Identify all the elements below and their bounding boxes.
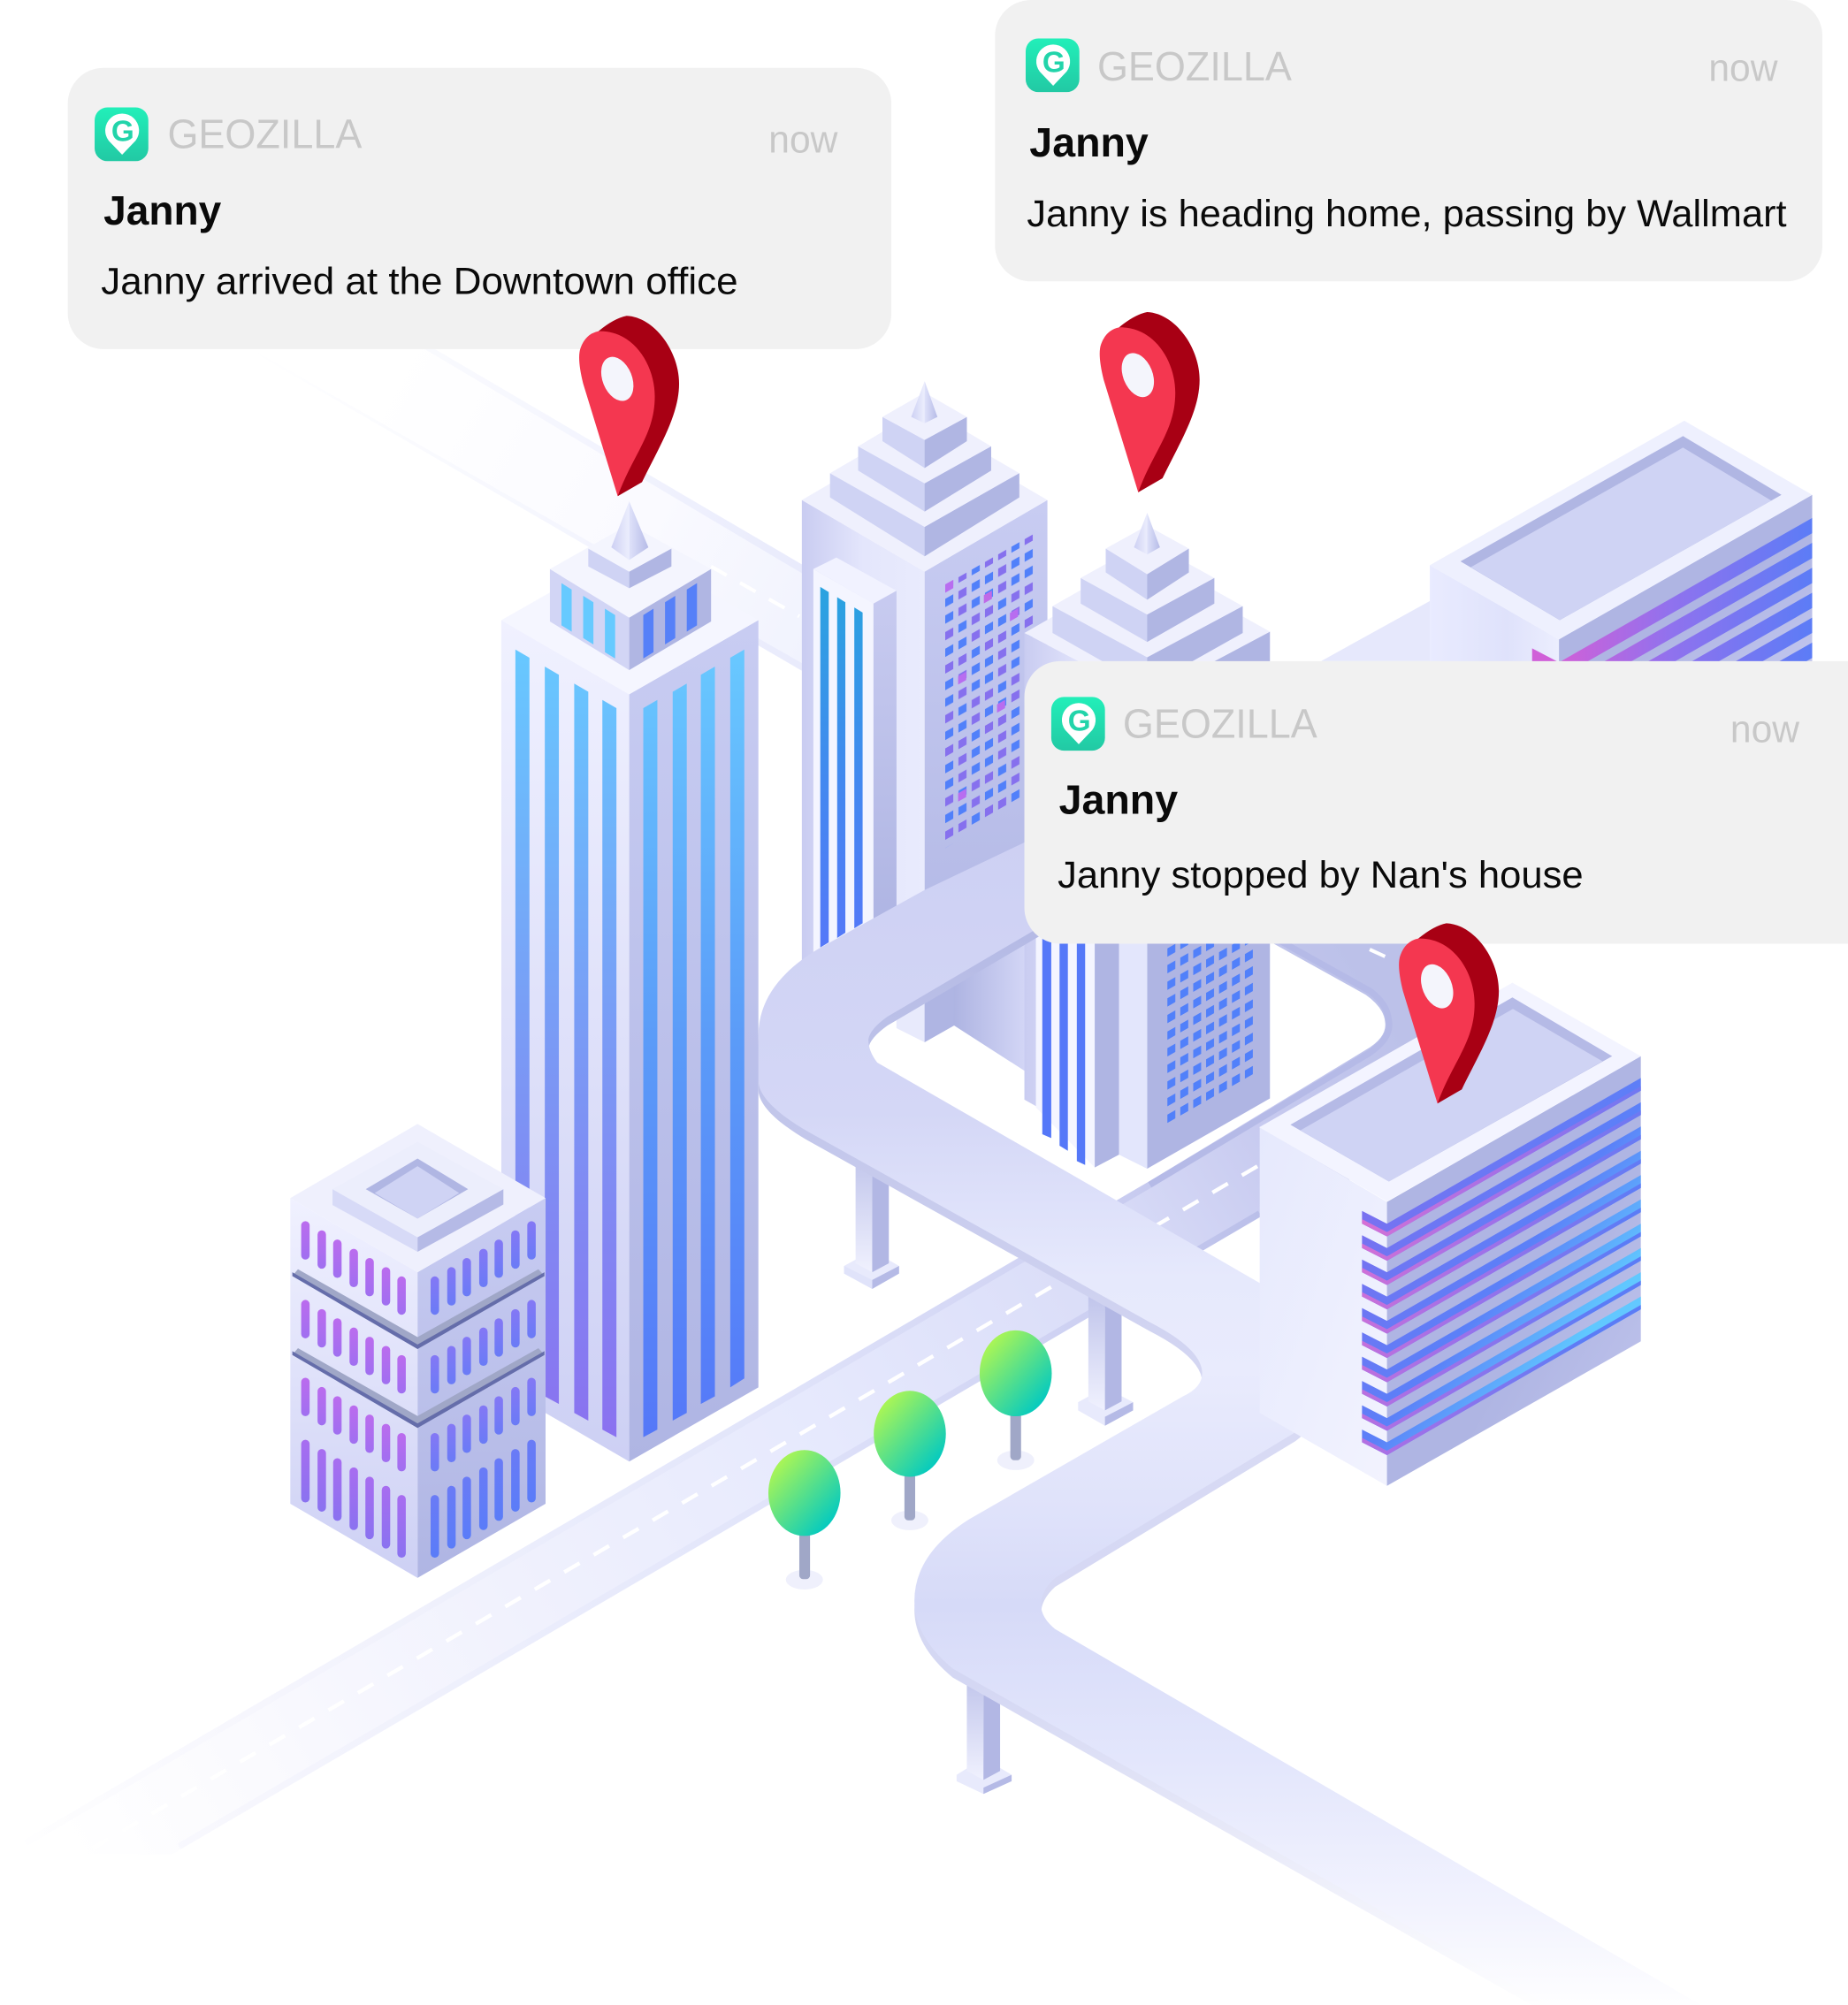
pylon left	[844, 1138, 899, 1289]
building: tower two	[802, 381, 1048, 1071]
building: tall tower one	[501, 501, 759, 1461]
location pin three	[1399, 923, 1499, 1103]
back road upper left	[248, 349, 819, 681]
brand name: GEOZILLA	[1123, 700, 1317, 746]
building: front right striped	[1259, 983, 1641, 1486]
brand name: GEOZILLA	[1097, 43, 1292, 89]
app icon	[95, 108, 149, 161]
tree one	[768, 1450, 841, 1590]
notification card: heading home	[995, 0, 1822, 281]
notification card: Nan's house	[1025, 661, 1848, 943]
sender name: Janny	[1029, 119, 1149, 165]
tree three	[980, 1330, 1051, 1470]
app icon: G	[1068, 705, 1091, 737]
timestamp: now	[1730, 708, 1800, 751]
brand name: GEOZILLA	[167, 111, 362, 157]
side road right	[1321, 601, 1430, 661]
location pin one	[579, 316, 679, 496]
sender name: Janny	[1059, 777, 1178, 823]
sender name: Janny	[103, 187, 221, 233]
building: top right	[1430, 421, 1813, 803]
overpass road underside	[759, 834, 1701, 2005]
building: small left block	[290, 1124, 546, 1578]
ground road with dashes	[0, 937, 1509, 1854]
building: tower three	[1025, 513, 1270, 1169]
message: Janny is heading home, passing by Wallmart	[1027, 193, 1787, 235]
pylon bottom	[957, 1662, 1012, 1794]
tree two	[874, 1391, 946, 1530]
message: Janny arrived at the Downtown office	[101, 261, 738, 303]
timestamp: now	[768, 119, 838, 162]
overpass road	[759, 825, 1701, 2005]
app icon	[1026, 38, 1080, 92]
pylon middle	[1078, 1278, 1133, 1426]
location pin two	[1100, 312, 1200, 492]
message: Janny stopped by Nan's house	[1058, 854, 1584, 896]
app icon: G	[111, 116, 134, 149]
notification card: Downtown office	[68, 68, 891, 349]
app icon: G	[1042, 46, 1065, 79]
timestamp: now	[1708, 48, 1778, 90]
app icon	[1051, 697, 1105, 751]
